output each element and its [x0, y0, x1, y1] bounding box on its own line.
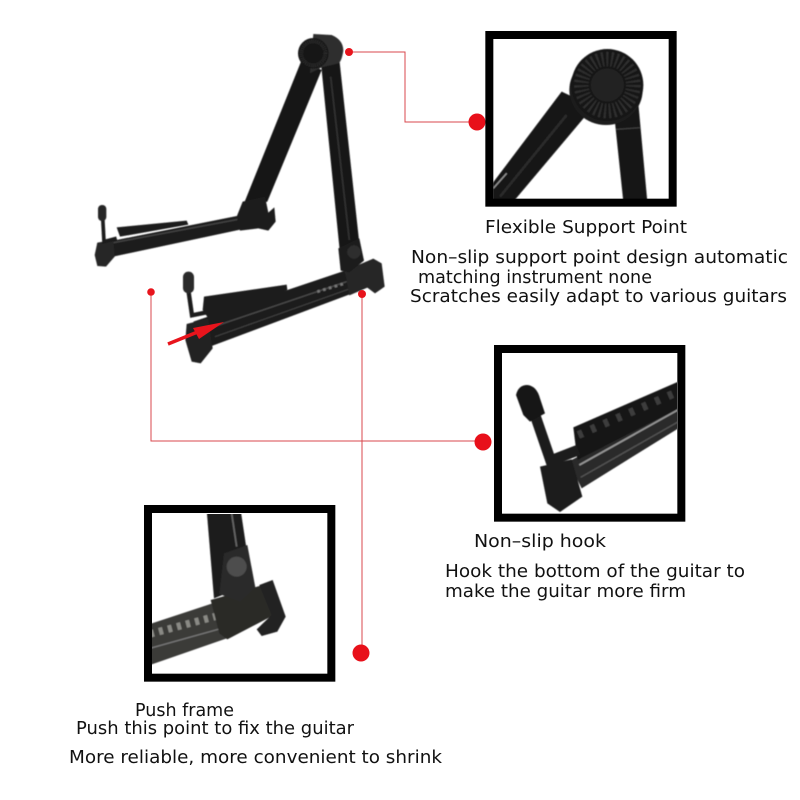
top cap	[310, 34, 343, 73]
cap back	[568, 75, 644, 126]
lower joint	[338, 238, 364, 273]
frame	[489, 35, 673, 203]
top non-slip disc	[298, 38, 329, 69]
text block: push frame description: Push this point to fix the guitar	[76, 718, 355, 739]
text block: support point description: matching instrument none	[418, 267, 652, 288]
hook knob	[516, 385, 545, 422]
lower foot	[185, 318, 213, 363]
joint	[219, 545, 255, 602]
end cap	[257, 580, 286, 636]
hook stem	[535, 415, 578, 461]
callout line: non-slip hook	[147, 288, 491, 450]
left arm	[242, 60, 322, 208]
red arrow on main photo	[168, 322, 224, 344]
foot	[540, 459, 582, 512]
text block: hook description	[445, 561, 745, 602]
upper base bar	[97, 215, 241, 258]
text block: hook description: Hook the bottom of the guitar to	[445, 561, 745, 582]
panel: push frame close-up	[148, 509, 331, 678]
leg	[613, 103, 647, 202]
frame	[498, 349, 681, 518]
heading: Non-slip hook: Non–slip hook	[474, 531, 607, 552]
text block: support point description: Scratches easily adapt to various guitars	[410, 286, 787, 307]
text block: hook description: make the guitar more firm	[445, 581, 686, 602]
upper foot	[95, 240, 115, 267]
rib rail	[573, 382, 678, 460]
leg	[206, 514, 247, 599]
right leg	[321, 59, 359, 253]
heading: Push frame: Push frame	[135, 700, 234, 721]
lower ribs	[203, 285, 287, 318]
disc	[572, 48, 644, 94]
main product photo: folding guitar stand	[95, 34, 385, 363]
text block: push frame description	[69, 718, 443, 768]
text block: support point description	[410, 247, 788, 307]
lower hook	[188, 290, 208, 315]
text block: push frame description: More reliable, more convenient to shrink	[69, 747, 443, 768]
frame	[148, 509, 331, 678]
upper hook	[103, 217, 117, 242]
arm	[493, 91, 584, 199]
heading: Flexible Support Point: Flexible Support Point	[485, 217, 687, 238]
bar	[568, 405, 678, 488]
bar	[150, 602, 227, 665]
sleeve	[211, 585, 274, 639]
text block: support point description: Non–slip support point design automatic	[411, 247, 788, 268]
upper joint	[237, 197, 276, 231]
panel: non-slip hook close-up	[498, 349, 681, 518]
lower base bar	[193, 271, 351, 346]
upper ribs	[117, 221, 188, 237]
panel: flexible support point close-up	[489, 35, 673, 203]
lower end cap	[345, 259, 385, 295]
callout line: support point	[345, 48, 486, 130]
callout line: push frame	[352, 290, 370, 662]
